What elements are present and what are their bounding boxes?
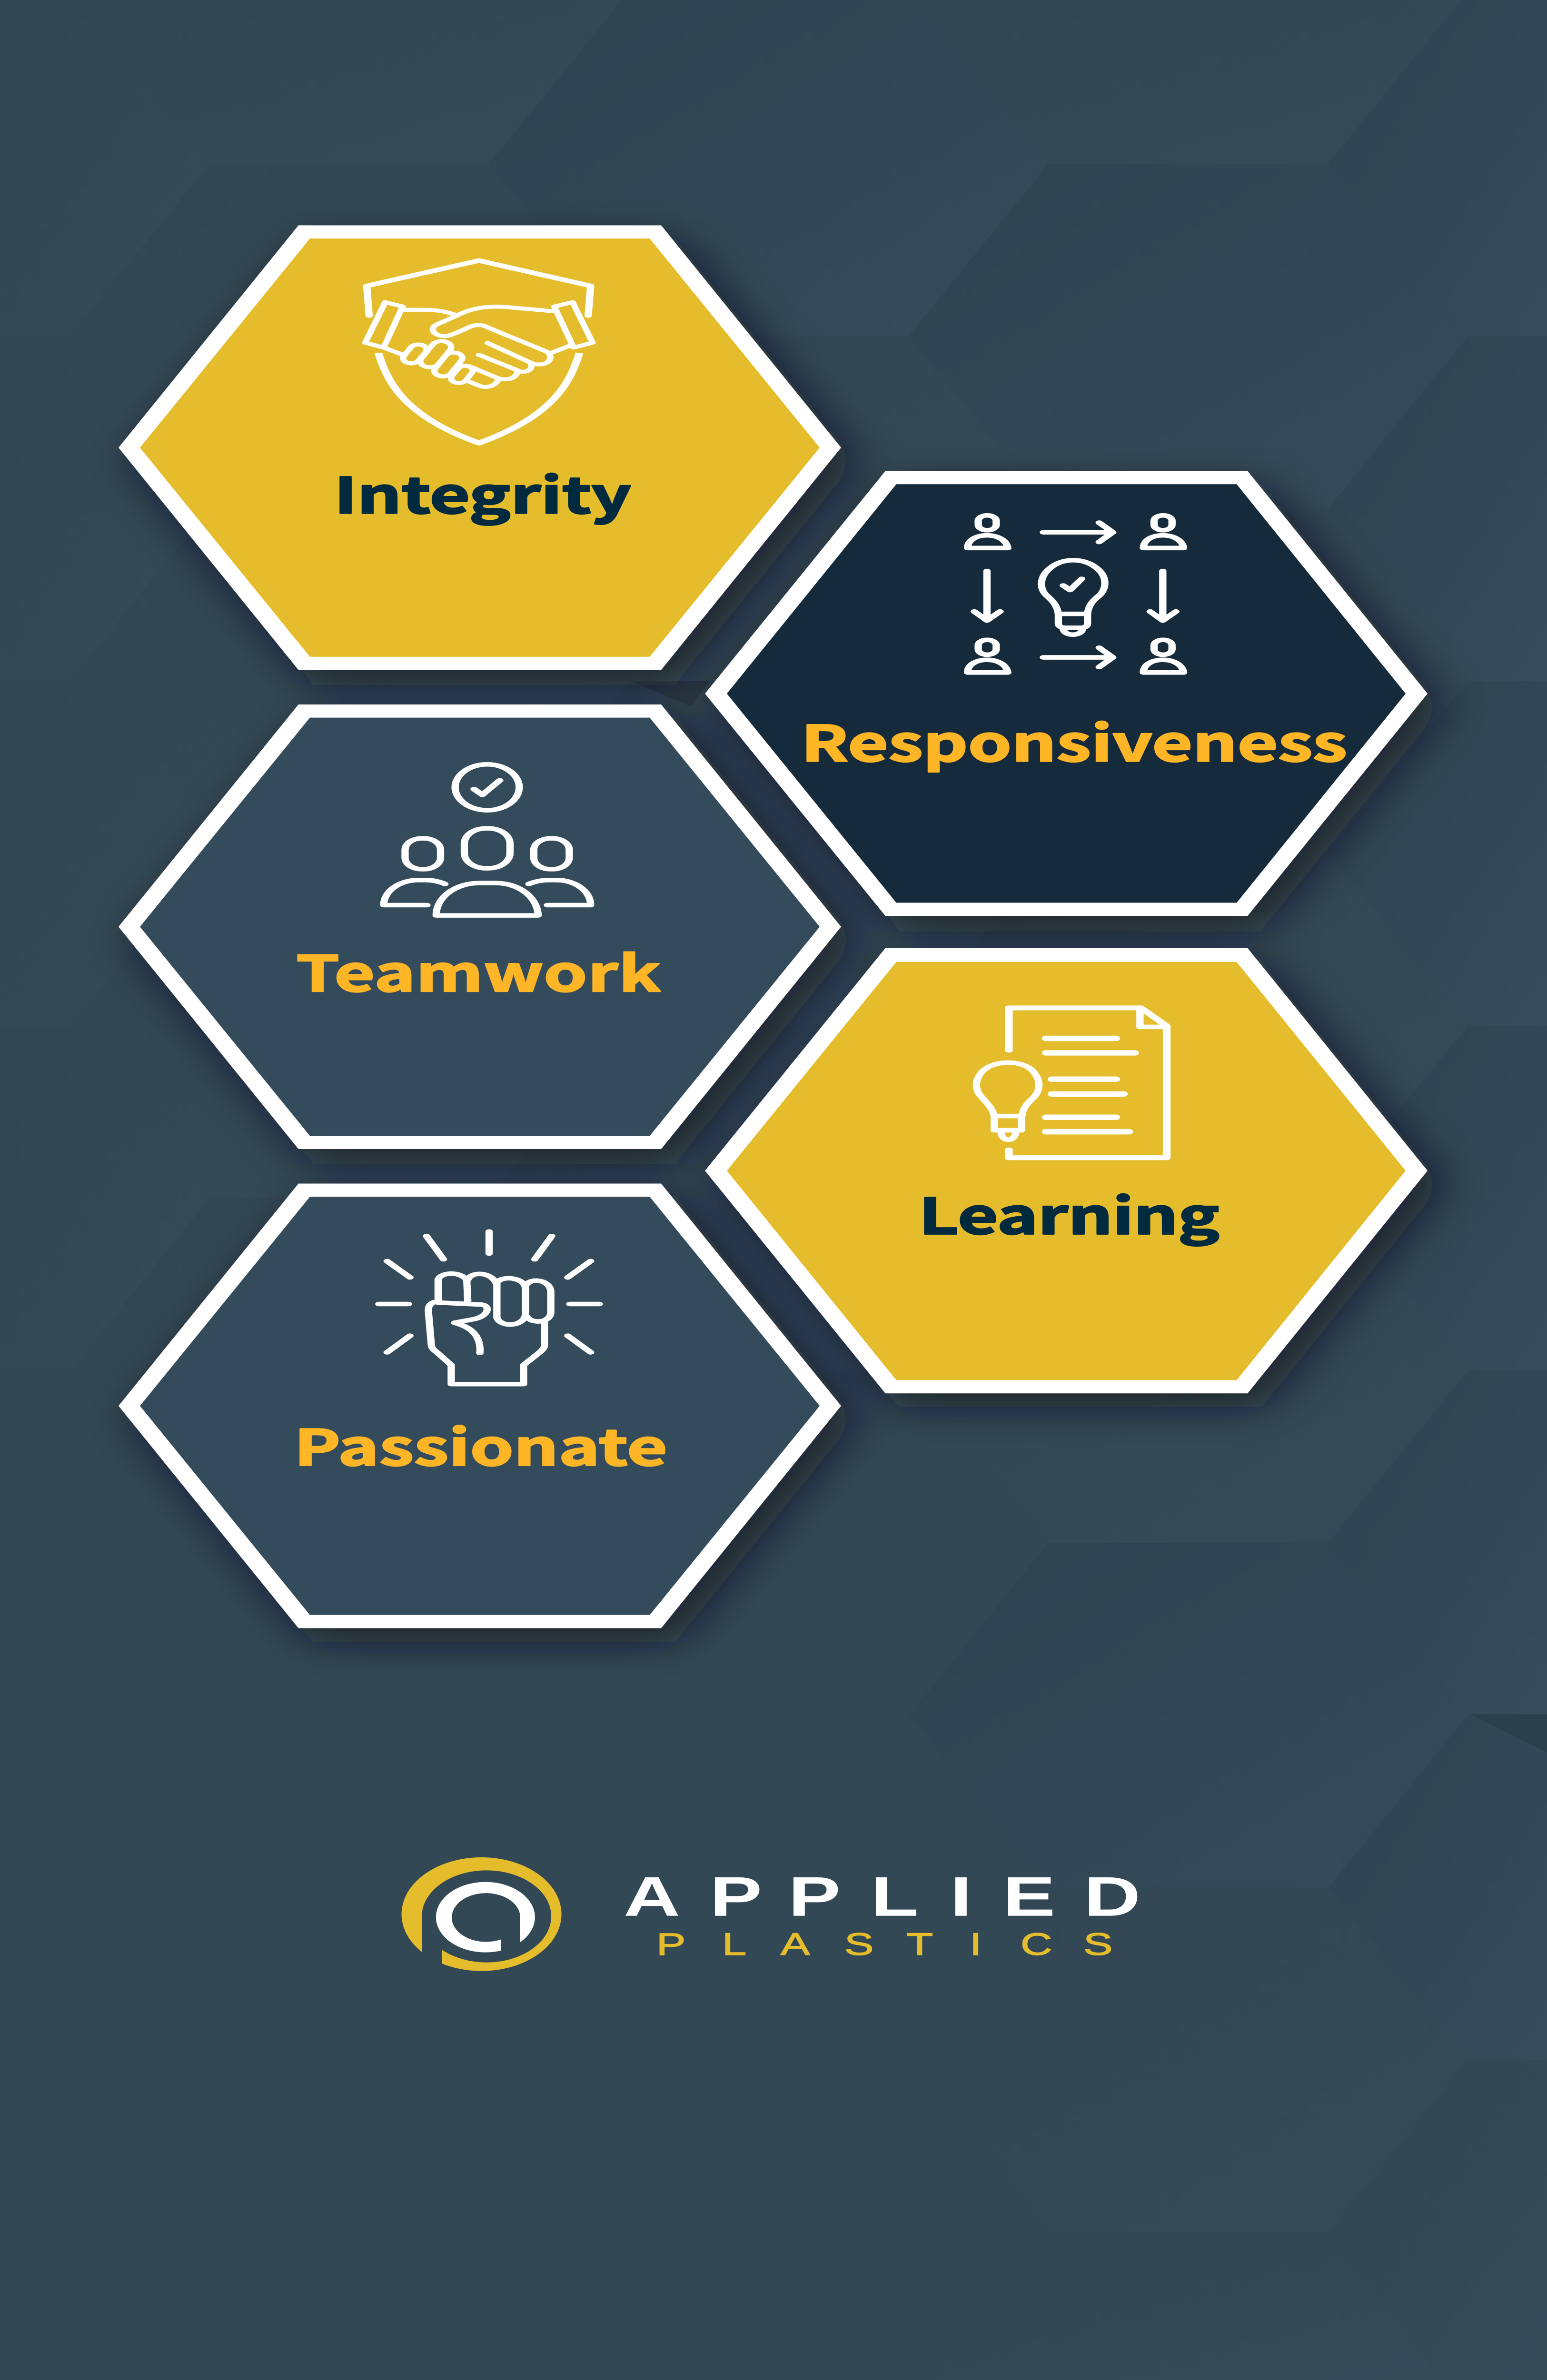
panel: Passionate	[119, 1183, 841, 1628]
label: Passionate: Passionate	[294, 1408, 667, 1480]
panel: Integrity	[119, 225, 841, 670]
icon: shield with handshake	[365, 260, 593, 443]
label: Responsiveness: Responsiveness	[801, 704, 1347, 776]
icon: team with check mark	[384, 764, 591, 915]
icon: document with light bulb	[976, 1008, 1167, 1158]
wordmark: PLASTICS: PLASTICS	[656, 1927, 1112, 1962]
hexagon: Integrity	[119, 225, 841, 670]
logo mark	[402, 1857, 562, 1971]
panel: Learning	[705, 948, 1428, 1393]
label: Integrity: Integrity	[334, 456, 631, 528]
label: Learning: Learning	[919, 1177, 1220, 1249]
panel: Responsiveness	[705, 471, 1428, 916]
hexagon: Learning	[705, 948, 1428, 1393]
hexagon: Passionate	[119, 1183, 841, 1628]
hexagon: Teamwork	[119, 704, 841, 1149]
icon: raised fist with rays	[379, 1231, 599, 1384]
hexagon drop shadows	[133, 239, 1442, 1642]
label: Teamwork: Teamwork	[296, 934, 661, 1006]
logo: Applied Plastics	[402, 1857, 1140, 1971]
wordmark: APPLIED: APPLIED	[624, 1865, 1140, 1928]
hexagon: Responsiveness	[705, 471, 1428, 916]
icon: people and arrows around a light bulb	[968, 516, 1184, 673]
panel: Teamwork	[119, 704, 841, 1149]
